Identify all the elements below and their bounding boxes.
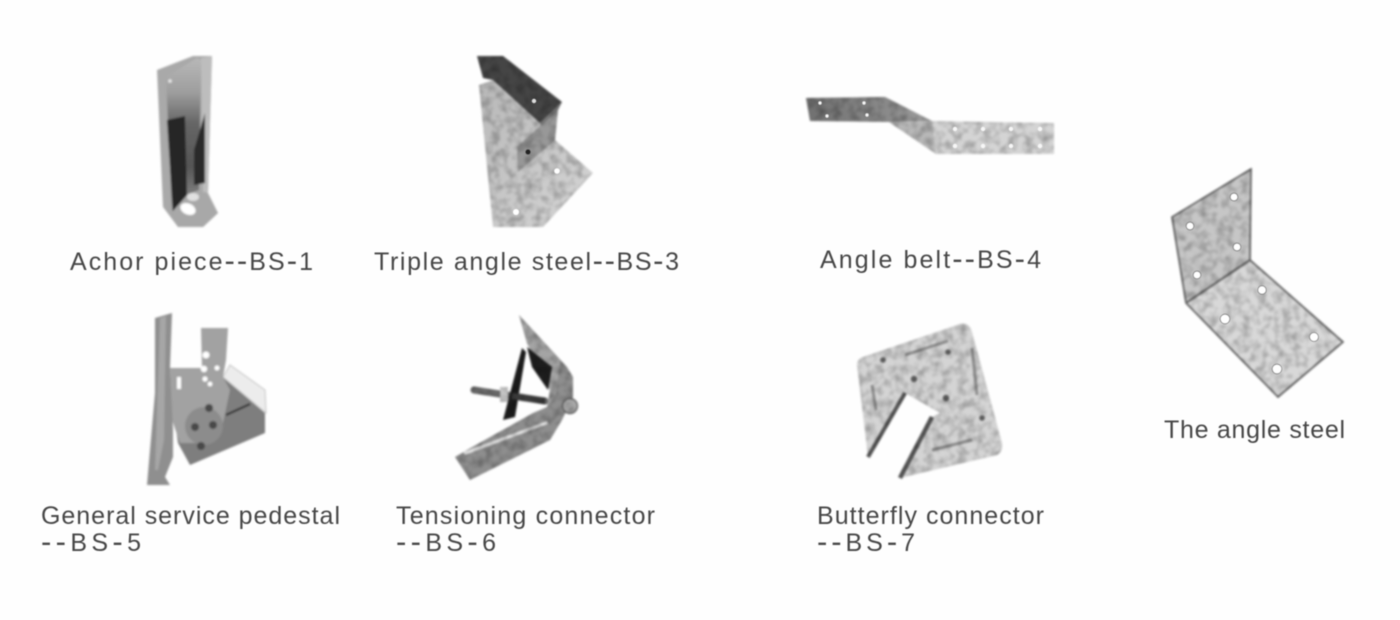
icon: anchor piece bracket xyxy=(157,56,218,227)
caption: BS-1: 1 xyxy=(299,248,313,276)
panel: tensioning connector BS-6: 6 xyxy=(482,529,496,557)
panel: general service pedestal BS-5: 5 xyxy=(127,529,141,557)
caption: BS-5: General service pedestal xyxy=(41,502,340,530)
icon: triple angle steel bracket xyxy=(477,56,593,227)
icon: angle steel bracket xyxy=(1172,169,1343,397)
icon: general service pedestal xyxy=(147,313,266,485)
caption: BS-3: -- xyxy=(593,243,615,278)
caption: BS-3: BS xyxy=(617,248,652,276)
icon: butterfly connector xyxy=(857,324,1002,478)
panel: tensioning connector BS-6 xyxy=(396,315,655,559)
caption: BS-1: Achor piece xyxy=(70,248,222,276)
caption: BS-1: - xyxy=(287,243,297,278)
caption: BS-1: BS xyxy=(249,248,285,276)
panel: butterfly connector BS-7: - xyxy=(887,524,897,559)
caption: BS-7: Butterfly connector xyxy=(817,502,1044,530)
panel: general service pedestal BS-5 xyxy=(41,313,340,559)
panel: butterfly connector BS-7 xyxy=(817,324,1044,559)
caption: the angle steel: The angle steel xyxy=(1164,416,1345,444)
panel: tensioning connector BS-6: - xyxy=(467,524,478,559)
caption: BS-3: 3 xyxy=(665,248,679,276)
panel: the angle steel xyxy=(1164,169,1345,444)
panel: general service pedestal BS-5: -- xyxy=(41,524,66,559)
caption: BS-1: -- xyxy=(225,243,247,278)
panel: butterfly connector BS-7: 7 xyxy=(901,529,915,557)
caption: BS-3: Triple angle steel xyxy=(374,248,591,276)
caption: BS-4: BS xyxy=(977,246,1013,274)
panel: general service pedestal BS-5: BS xyxy=(70,529,108,557)
panel: triple angle steel BS-3 xyxy=(374,56,679,278)
caption: BS-4: Angle belt xyxy=(820,246,950,274)
panel: tensioning connector BS-6: BS xyxy=(425,529,463,557)
caption: BS-4: -- xyxy=(952,241,975,276)
caption: BS-6: Tensioning connector xyxy=(396,502,655,530)
panel: general service pedestal BS-5: - xyxy=(112,524,123,559)
caption: BS-3: - xyxy=(653,243,663,278)
panel: butterfly connector BS-7: BS xyxy=(846,529,883,557)
caption: BS-4: - xyxy=(1015,241,1025,276)
panel: anchor piece BS-1 xyxy=(70,56,313,278)
panel: tensioning connector BS-6: -- xyxy=(396,524,421,559)
icon: tensioning connector xyxy=(455,315,578,480)
panel: angle belt BS-4 xyxy=(806,97,1054,276)
icon: angle belt strap xyxy=(806,97,1054,154)
panel: butterfly connector BS-7: -- xyxy=(817,524,842,559)
caption: BS-4: 4 xyxy=(1027,246,1041,274)
